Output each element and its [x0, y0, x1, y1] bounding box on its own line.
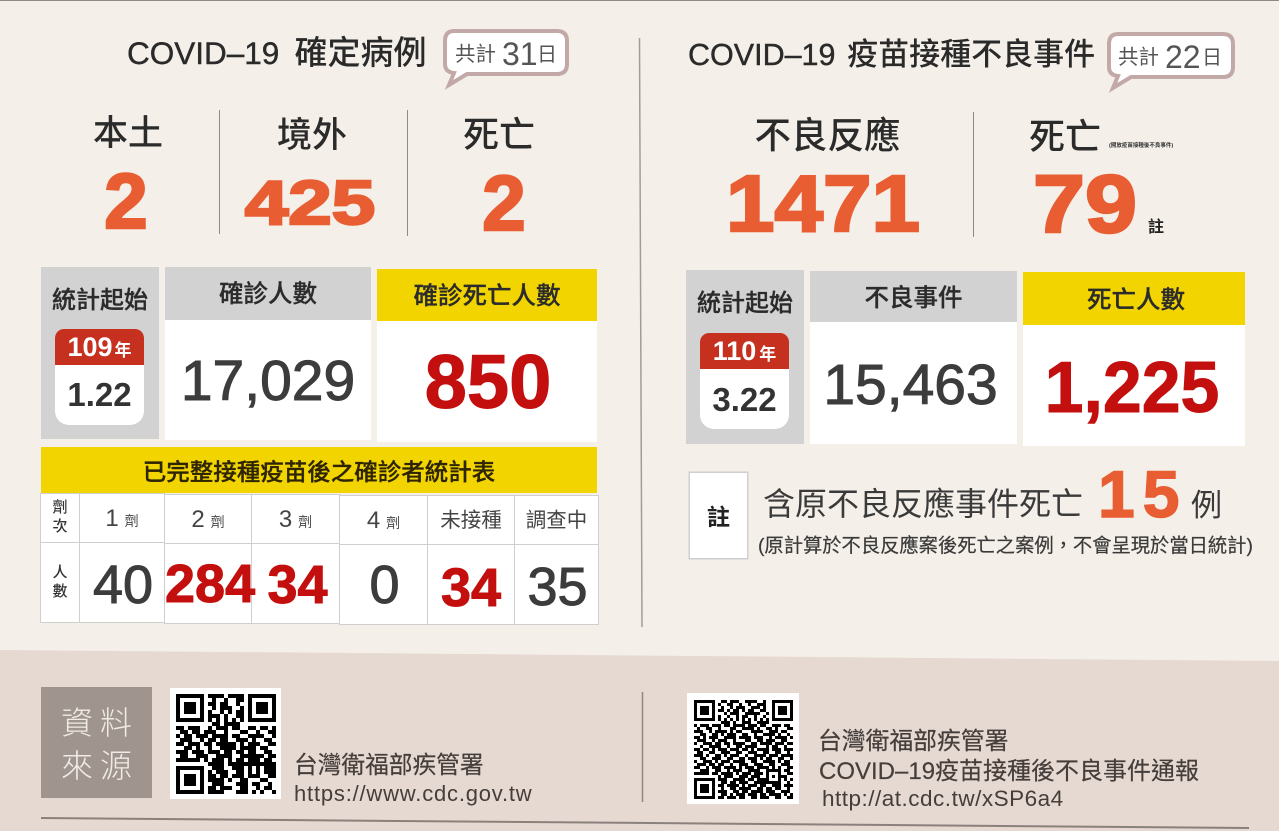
callout: 31 days [443, 29, 569, 90]
heading: adverse events: COVID–19 疫苗接種不良事件 [688, 37, 1095, 72]
panel: deaths count [377, 269, 597, 442]
source label: 來源 [61, 748, 139, 784]
note text [758, 457, 1253, 557]
top edge shade [0, 0, 1279, 1]
stat: imported: 境外 [277, 116, 347, 155]
note text: 例 [1191, 488, 1222, 523]
note box: 註 [707, 504, 730, 530]
source text: adverse event reporting: http://at.cdc.tw/xSP6a4 [822, 786, 1064, 811]
dose row: 1 劑 [105, 505, 139, 532]
divider [218, 110, 220, 234]
divider [972, 112, 974, 237]
panel: confirmed cases [40, 29, 599, 625]
dose row [40, 493, 599, 625]
source text: CDC: https://www.cdc.gov.tw [294, 781, 532, 806]
panel: start date: 統計起始 [52, 287, 148, 314]
source text: CDC: 台灣衛福部疾管署 [294, 753, 484, 779]
stat: deaths [463, 114, 535, 247]
panel: deaths count: 850 [425, 340, 551, 425]
QR code: adverse event report [687, 693, 799, 804]
panel: death count: 死亡人數 [1087, 287, 1185, 314]
stat: vaccine deaths: 註 [1148, 219, 1164, 236]
icon: calendar: 1.22 [67, 376, 132, 413]
panel: confirmed count: 確診人數 [219, 281, 317, 308]
source text: adverse event reporting [818, 728, 1199, 811]
callout: 31 days: 日 [537, 44, 557, 66]
callout: 22 days: 日 [1202, 47, 1222, 69]
divider [406, 110, 408, 236]
stat: deaths: 2 [482, 159, 526, 247]
panel: data sources [41, 687, 1199, 811]
dose row: 未接種 [440, 509, 502, 532]
dose row: 40 [93, 555, 153, 615]
panel: start date [686, 270, 804, 444]
stat: imported [244, 116, 375, 238]
panel: vaccination table [40, 447, 599, 625]
dose row: 4 劑 [367, 507, 400, 534]
heading: confirmed cases: COVID–19 確定病例 [127, 34, 426, 71]
panel: deaths count: 確診死亡人數 [414, 283, 560, 310]
stat: vaccine deaths [1029, 116, 1173, 250]
stat: imported: 425 [245, 169, 375, 238]
table heading [41, 447, 597, 493]
stat: domestic [93, 114, 163, 245]
panel: adverse count: 不良事件 [864, 285, 962, 312]
callout: 22 days: 22 [1165, 39, 1201, 75]
icon: calendar [700, 333, 789, 429]
callout: 31 days: 31 [502, 36, 538, 72]
dose row: 0 [369, 555, 400, 615]
source label: 資料 [61, 705, 139, 741]
dose row: 調查中 [526, 509, 587, 532]
QR code: CDC website [170, 688, 281, 799]
note text: 15 [1098, 457, 1187, 531]
stat: domestic: 2 [104, 157, 148, 245]
panel: death count [1023, 272, 1245, 446]
source text: adverse event reporting: 台灣衛福部疾管署 [818, 728, 1008, 755]
dose row: 34 [441, 558, 501, 618]
callout: 22 days: 共計 [1118, 46, 1159, 69]
dose row: 次 [52, 518, 68, 535]
stat: vaccine deaths: 79 [1033, 159, 1137, 250]
panel: start date: 統計起始 [697, 290, 793, 317]
dose row: 2 劑 [191, 506, 225, 533]
source text: adverse event reporting: COVID–19疫苗接種後不良事件通報 [819, 758, 1199, 785]
callout: 22 days [1107, 32, 1235, 93]
stat: vaccine deaths: (開放疫苗接種後不良事件) [1109, 143, 1173, 149]
panel: vaccine adverse events [686, 32, 1253, 560]
panel: adverse count [810, 271, 1017, 444]
stat: vaccine deaths: 死亡 [1029, 116, 1101, 157]
stat: adverse reactions: 不良反應 [754, 115, 900, 156]
stat: adverse reactions [726, 115, 920, 248]
source text: CDC [294, 752, 532, 806]
dose row: 劑 [52, 499, 68, 516]
note text: (原計算於不良反應案後死亡之案例，不會呈現於當日統計) [758, 536, 1253, 557]
table heading: 已完整接種疫苗後之確診者統計表 [143, 459, 495, 485]
panel: start date [41, 267, 159, 439]
dose row: 284 [165, 554, 255, 614]
dose row: 3 劑 [279, 506, 312, 533]
stat: deaths: 死亡 [463, 114, 535, 155]
dose row: 34 [267, 555, 328, 615]
icon: calendar: 3.22 [712, 381, 777, 418]
icon: calendar: 110年 [713, 336, 776, 366]
stat: domestic: 本土 [93, 114, 163, 153]
note box [690, 473, 747, 558]
stat: adverse reactions: 1471 [726, 159, 920, 248]
dose row: 人 [52, 564, 68, 581]
note text: 含原不良反應事件死亡 [763, 486, 1083, 522]
icon: calendar [55, 329, 144, 425]
source label [41, 687, 152, 798]
panel: confirmed count [165, 267, 371, 440]
callout: 31 days: 共計 [455, 43, 496, 66]
icon: calendar: 109年 [67, 332, 132, 362]
dose row: 數 [52, 583, 68, 600]
panel: death count: 1,225 [1045, 348, 1219, 428]
dose row: 35 [527, 557, 588, 617]
panel: confirmed count: 17,029 [181, 349, 355, 413]
panel: adverse count: 15,463 [823, 353, 998, 417]
